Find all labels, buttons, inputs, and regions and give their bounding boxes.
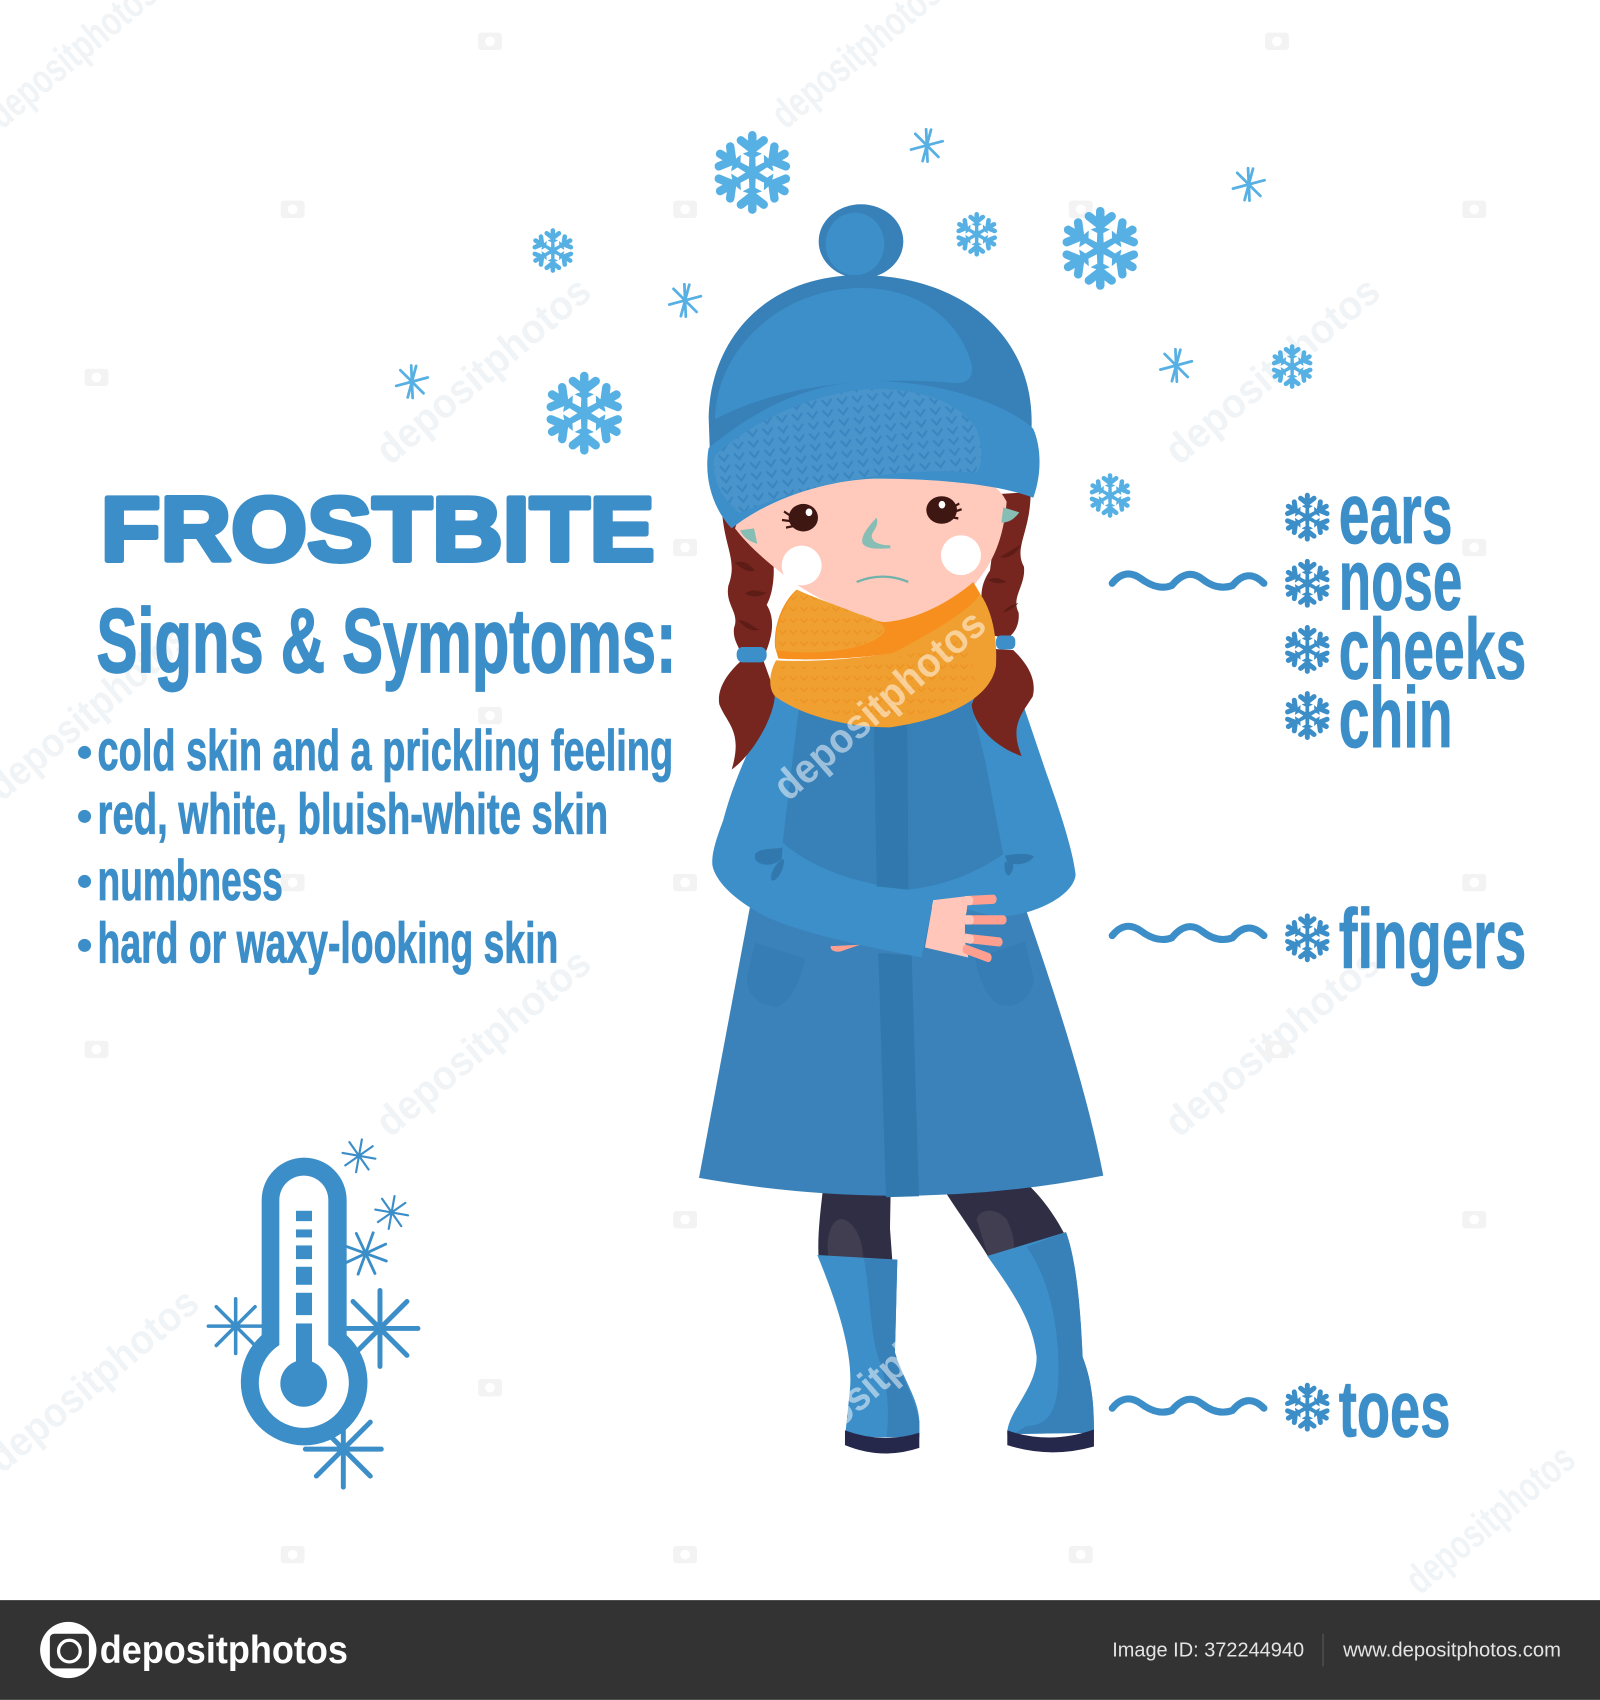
title: FROSTBITE	[101, 480, 655, 581]
symptom: skin colour	[78, 783, 608, 847]
coat	[699, 696, 1103, 1197]
label: chin	[1285, 669, 1453, 766]
right braid	[972, 492, 1034, 756]
label: toes: toes	[1339, 1363, 1450, 1453]
scarf	[770, 582, 996, 727]
symptom: numbness	[78, 849, 283, 913]
eyes	[782, 496, 962, 531]
label: nose	[1285, 531, 1462, 628]
footer bar	[0, 1600, 1600, 1700]
mouth	[857, 577, 908, 582]
connector: fingers	[1112, 926, 1264, 939]
legs and boots	[817, 1187, 1094, 1453]
brim	[707, 381, 1040, 528]
symptom: cold skin	[78, 719, 673, 783]
frostbitten cheeks	[782, 535, 981, 585]
pockets	[747, 943, 805, 1007]
right boot	[987, 1232, 1094, 1452]
symptom: skin colour: red, white, bluish-white skin	[98, 783, 608, 847]
symptoms list	[78, 719, 673, 976]
watermark: depositphotos	[1156, 939, 1389, 1145]
coat upper placket	[873, 696, 908, 890]
label: chin: chin	[1339, 669, 1453, 766]
label: fingers	[1285, 891, 1526, 986]
hat	[707, 204, 1040, 528]
face	[735, 456, 1007, 622]
crown	[709, 275, 1032, 456]
falling snowflakes	[394, 126, 1313, 516]
subtitle: Signs & Symptoms:	[96, 591, 676, 692]
symptom: cold skin: cold skin and a prickling feeling	[98, 719, 673, 783]
watermark: depositphotos	[366, 267, 599, 473]
affected areas labels	[1285, 465, 1526, 1453]
logo icon	[40, 1622, 96, 1678]
legs	[818, 1187, 1064, 1261]
watermark on coat: depositphotos	[764, 600, 994, 809]
label: nose: nose	[1339, 531, 1462, 628]
girl in winter clothes	[699, 204, 1103, 1481]
coat chest	[783, 698, 1003, 890]
pom-pom	[819, 204, 903, 278]
sleeve tabs	[755, 847, 1034, 881]
symptom: waxy skin	[78, 912, 558, 976]
connector: toes	[1112, 1399, 1264, 1412]
logo wordmark: depositphotos	[100, 1629, 348, 1672]
watermark on boot: depositphotos	[764, 1272, 994, 1481]
watermark: depositphotos	[1156, 267, 1389, 473]
coat skirt	[699, 898, 1103, 1196]
label: cheeks	[1285, 601, 1526, 698]
left braid	[719, 505, 775, 769]
website: www.depositphotos.com	[1342, 1639, 1561, 1662]
left boot	[817, 1255, 919, 1453]
label: toes	[1285, 1363, 1450, 1453]
connector: face	[1112, 574, 1264, 587]
symptom: numbness: numbness	[98, 849, 283, 913]
watermark: depositphotos	[366, 939, 599, 1145]
label: ears	[1285, 465, 1453, 562]
image id: Image ID: 372244940	[1112, 1639, 1304, 1662]
nose	[862, 518, 891, 549]
ears	[740, 507, 1019, 544]
head	[707, 204, 1040, 769]
label: ears: ears	[1339, 465, 1453, 562]
coat lower placket	[878, 953, 919, 1197]
hands	[831, 896, 1003, 958]
icon: thermometer with snow	[208, 1136, 418, 1487]
coat sleeves and shoulders	[712, 696, 1076, 958]
symptom: waxy skin: hard or waxy-looking skin	[98, 912, 558, 976]
